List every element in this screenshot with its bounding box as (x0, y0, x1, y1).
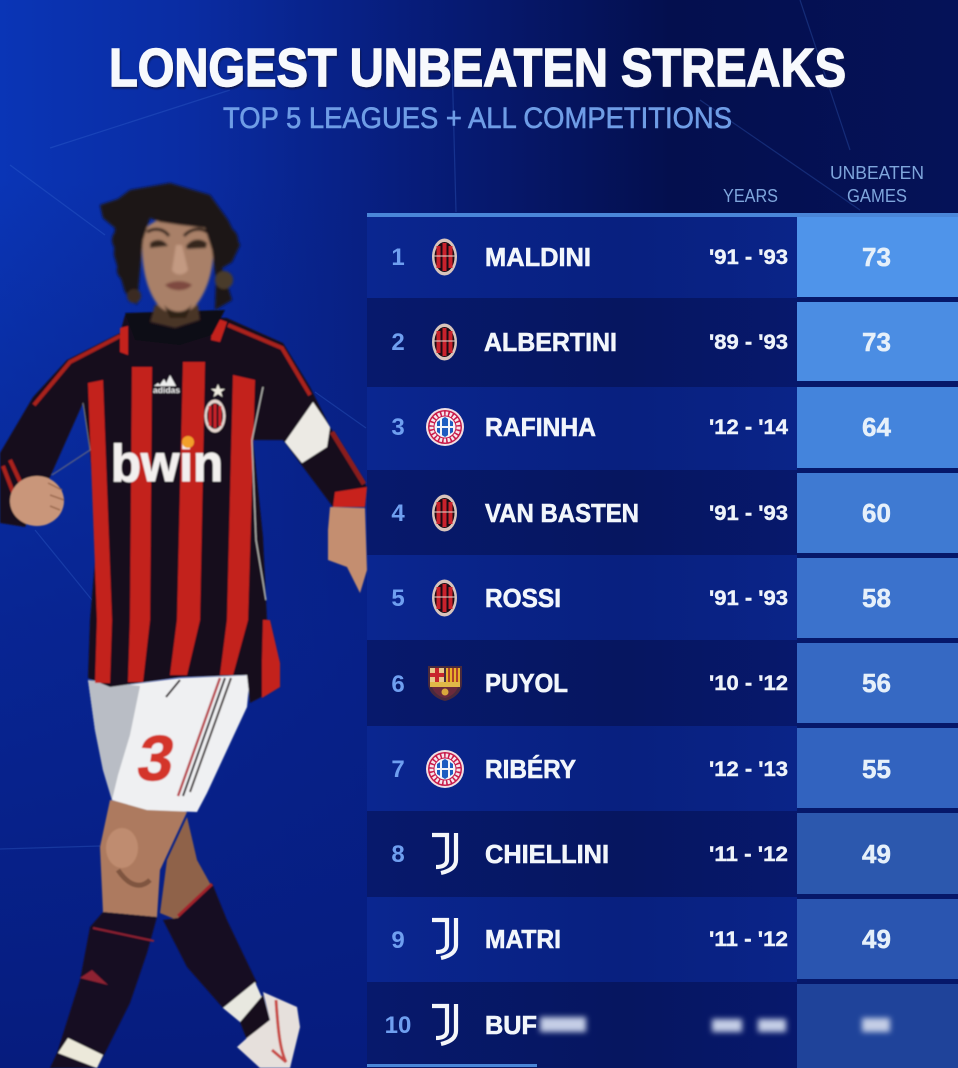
title: LONGEST UNBEATEN STREAKS (109, 38, 846, 98)
row 4 (367, 470, 958, 555)
face (142, 217, 213, 318)
icon: Juventus crest (432, 918, 456, 958)
sponsor dot (182, 436, 194, 448)
sponsor: bwin (111, 435, 223, 493)
row 8: CHIELLINI (485, 839, 609, 869)
row 10 (367, 982, 958, 1068)
row 5 (367, 555, 958, 640)
column header: unbeaten games: UNBEATEN (830, 163, 924, 183)
row 8: 8 (391, 841, 405, 868)
icon: Juventus crest (432, 1004, 456, 1044)
right cuff (333, 487, 367, 507)
shoe (237, 992, 300, 1068)
column header: years: YEARS (723, 186, 778, 206)
neck (150, 305, 200, 328)
row 6: 56 (862, 668, 891, 698)
icon: Barcelona crest (428, 666, 462, 701)
head (100, 183, 240, 328)
row 3: 3 (391, 414, 405, 441)
row 9: '11 - '12 (709, 928, 788, 951)
icon: AC Milan crest (432, 580, 457, 616)
row 4: 4 (391, 500, 405, 527)
shorts number: 3 (133, 722, 180, 794)
row 4: 60 (862, 498, 891, 528)
jersey (0, 310, 367, 703)
row 4: '91 - '93 (709, 502, 788, 525)
icon: Juventus crest (432, 833, 456, 873)
row 9: MATRI (485, 924, 561, 954)
front leg (50, 800, 187, 1068)
star (211, 384, 225, 397)
subtitle: TOP 5 LEAGUES + ALL COMPETITIONS (223, 102, 732, 135)
row 2: '89 - '93 (709, 331, 788, 354)
icon: AC Milan crest (432, 324, 457, 360)
row 8: '11 - '12 (709, 843, 788, 866)
icon: Bayern crest (426, 750, 464, 788)
row 6 (367, 640, 958, 726)
jersey badge (204, 400, 226, 432)
adidas mark: adidas (153, 386, 181, 395)
row 1 (367, 217, 958, 298)
row 7: 55 (862, 754, 891, 784)
row 7: '12 - '13 (709, 758, 788, 781)
icon: Bayern crest (426, 408, 464, 446)
row 3: '12 - '14 (709, 416, 788, 439)
hair (100, 183, 240, 310)
top accent line (367, 213, 958, 217)
shorts (88, 675, 250, 812)
bottom accent line (367, 1064, 537, 1067)
row 6: PUYOL (485, 668, 568, 698)
player figure (0, 183, 367, 1068)
sleeve trim (34, 336, 120, 405)
row 7: RIBÉRY (485, 754, 576, 784)
table (367, 213, 958, 1068)
captain armband (285, 402, 330, 463)
row 2: 73 (862, 327, 891, 357)
row 3 (367, 387, 958, 470)
jersey stripes (88, 362, 280, 698)
adidas mark (153, 375, 181, 395)
row 5: ROSSI (485, 583, 561, 613)
row 1: '91 - '93 (709, 246, 788, 269)
row 8 (367, 811, 958, 897)
right hand (328, 507, 367, 593)
row 5: 58 (862, 583, 891, 613)
row 5: '91 - '93 (709, 587, 788, 610)
row 5: 5 (391, 585, 405, 612)
table background (367, 213, 958, 1068)
piping (252, 387, 266, 600)
row 10: 10 (385, 1012, 411, 1039)
icon: AC Milan crest (432, 238, 457, 276)
row 6: 6 (391, 671, 405, 698)
collar (120, 317, 227, 355)
row 2 (367, 298, 958, 387)
row 1: 1 (391, 244, 405, 271)
back leg (160, 817, 270, 1040)
row 1: MALDINI (485, 242, 591, 272)
column header: unbeaten games: GAMES (847, 186, 907, 206)
row 6: '10 - '12 (709, 672, 788, 695)
row 7 (367, 726, 958, 811)
row 9: 49 (862, 924, 891, 954)
left hand (10, 476, 64, 526)
row 3: 64 (862, 412, 891, 442)
icon: AC Milan crest (432, 494, 457, 532)
blurred patches over name, years and value (540, 1017, 890, 1032)
row 1: 73 (862, 242, 891, 272)
row 2: 2 (391, 329, 405, 356)
row 9: 9 (391, 927, 405, 954)
row 7: 7 (391, 756, 405, 783)
row 2: ALBERTINI (484, 327, 617, 357)
row 4: VAN BASTEN (485, 498, 639, 528)
row 8: 49 (862, 839, 891, 869)
row 3: RAFINHA (485, 412, 596, 442)
row 10: BUF (485, 1010, 537, 1040)
row 9 (367, 897, 958, 982)
column header: unbeaten games (830, 163, 924, 206)
